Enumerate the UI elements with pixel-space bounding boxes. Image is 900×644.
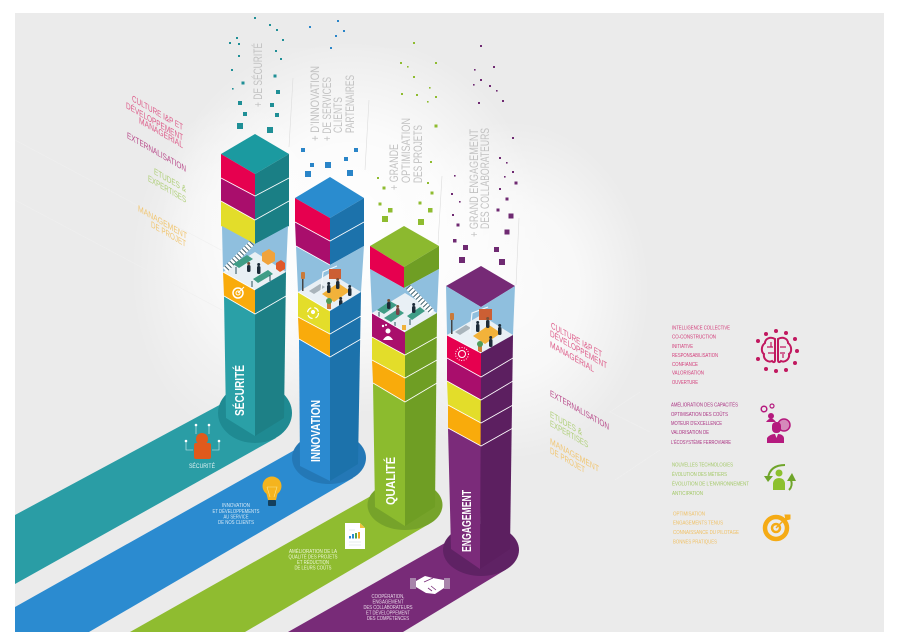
caption: engagement: DES COLLABORATEURS bbox=[478, 128, 492, 229]
column title: ENGAGEMENT bbox=[460, 490, 474, 552]
icon: document chart bbox=[345, 523, 365, 549]
caption: engagement: ET DÉVELOPPEMENT bbox=[366, 610, 410, 616]
top face bbox=[221, 134, 289, 174]
label: culture bbox=[126, 94, 183, 151]
column: qualité bbox=[370, 226, 439, 526]
caption: innovation: DE NOS CLIENTS bbox=[218, 520, 254, 526]
list: externalisation: L’ÉCOSYSTÈME FERROVIAIRE bbox=[671, 439, 731, 446]
list: culture: CONFIANCE bbox=[672, 362, 698, 368]
upper right face bbox=[330, 198, 364, 265]
caption: qualité: AMÉLIORATION DE LA bbox=[289, 548, 337, 555]
label: culture: DÉVELOPPEMENT bbox=[550, 329, 607, 372]
list: etudes: ÉVOLUTION DE L’ENVIRONNEMENT bbox=[672, 480, 750, 488]
caption: qualité: DES PROJETS bbox=[411, 125, 425, 183]
column: engagement bbox=[446, 266, 515, 569]
label: culture: MANAGÉRIAL bbox=[139, 116, 183, 151]
label: etudes bbox=[148, 167, 186, 206]
list: culture bbox=[672, 326, 730, 386]
icon: brain bbox=[456, 348, 468, 360]
upper right face bbox=[255, 154, 289, 244]
list: culture: OUVERTURE bbox=[672, 380, 698, 386]
list: externalisation: MOTEUR D’EXCELLENCE bbox=[671, 421, 722, 427]
caption: qualité: QUALITÉ DES PROJETS bbox=[288, 554, 338, 560]
caption: innovation: + D’INNOVATION bbox=[308, 66, 322, 141]
caption: qualité: DE LEURS COÛTS bbox=[294, 564, 332, 572]
icon: person arrows bbox=[308, 308, 318, 318]
label: culture: DÉVELOPPEMENT bbox=[126, 101, 183, 144]
list: culture: RESPONSABILISATION bbox=[672, 353, 718, 359]
icon: target bbox=[233, 287, 244, 298]
label: externalisation: EXTERNALISATION bbox=[550, 389, 609, 433]
label: culture: CULTURE I&P ET bbox=[132, 94, 183, 133]
label: management: MANAGEMENT bbox=[550, 437, 599, 475]
ribbon: qualité bbox=[130, 492, 429, 632]
caption: de sécurité: + DE SÉCURITÉ bbox=[250, 43, 265, 107]
caption: innovation bbox=[308, 66, 357, 141]
list: culture: VALORISATION bbox=[672, 370, 704, 376]
label: management: MANAGEMENT bbox=[138, 204, 187, 242]
caption: qualité bbox=[288, 548, 338, 572]
list: culture: CO-CONSTRUCTION bbox=[672, 334, 716, 340]
caption: qualité: OPTIMISATION bbox=[399, 118, 413, 183]
list: management: OPTIMISATION bbox=[673, 512, 705, 518]
caption: sécurité: SÉCURITÉ bbox=[189, 463, 215, 470]
caption: innovation: PARTENAIRES bbox=[343, 75, 357, 133]
ribbon icons and captions bbox=[185, 424, 450, 622]
label: etudes: ETUDES & bbox=[154, 167, 186, 195]
ribbon: sécurité bbox=[15, 402, 276, 584]
caption: innovation bbox=[212, 503, 260, 526]
top face bbox=[295, 177, 364, 218]
right slanted labels bbox=[550, 321, 609, 476]
left slanted labels bbox=[126, 94, 187, 250]
squares: innovation bbox=[301, 20, 358, 177]
column title: SÉCURITÉ bbox=[232, 365, 247, 416]
icon: brain bbox=[756, 329, 799, 373]
label: culture: MANAGÉRIAL bbox=[550, 340, 594, 375]
room bbox=[296, 246, 364, 311]
squares: engagement bbox=[451, 45, 518, 265]
label: etudes: EXPERTISES bbox=[148, 174, 186, 206]
list: etudes bbox=[672, 462, 750, 497]
icon: person with arrows bbox=[764, 465, 796, 490]
label: etudes: EXPERTISES bbox=[550, 419, 588, 451]
caption: engagement: DES COMPÉTENCES bbox=[367, 615, 409, 622]
right lists bbox=[671, 326, 750, 546]
list: management: ENGAGEMENTS TENUS bbox=[673, 520, 723, 526]
icon: people bbox=[382, 324, 393, 340]
list: management: BONNES PRATIQUES bbox=[673, 540, 717, 546]
list: externalisation: OPTIMISATION DES COÛTS bbox=[671, 411, 728, 418]
squares: sécurité bbox=[229, 17, 284, 133]
label: management bbox=[550, 437, 599, 476]
caption: engagement: + GRAND ENGAGEMENT bbox=[467, 128, 481, 237]
caption: qualité: ET RÉDUCTION bbox=[297, 559, 329, 566]
room bbox=[222, 226, 288, 290]
icon: handshake bbox=[410, 576, 450, 594]
top captions bbox=[250, 43, 492, 237]
caption: innovation: AU SERVICE bbox=[224, 514, 249, 520]
upper right face bbox=[404, 246, 439, 288]
list: externalisation: VALORISATION DE bbox=[671, 430, 709, 436]
list: culture: INTELLIGENCE COLLECTIVE bbox=[672, 326, 730, 332]
list: etudes: ÉVOLUTION DES MÉTIERS bbox=[672, 471, 727, 478]
list: etudes: ANTICIPATION bbox=[672, 491, 703, 497]
caption: qualité: + GRANDE bbox=[387, 144, 401, 190]
top face bbox=[446, 266, 515, 307]
caption: innovation: ET DÉVELOPPEMENTS bbox=[212, 508, 260, 515]
column title: INNOVATION bbox=[309, 400, 323, 462]
caption: engagement: ENGAGEMENT bbox=[372, 600, 404, 606]
room bbox=[370, 269, 439, 332]
caption: innovation: INNOVATION bbox=[222, 503, 250, 509]
room bbox=[446, 286, 515, 353]
label: culture: CULTURE I&P ET bbox=[551, 321, 602, 360]
icon: manager with globe bbox=[761, 404, 790, 443]
column: innovation bbox=[295, 177, 364, 481]
label: management: DE PROJET bbox=[550, 446, 585, 476]
caption: engagement bbox=[364, 593, 413, 622]
caption: engagement: DES COLLABORATEURS bbox=[364, 605, 413, 611]
label: externalisation: EXTERNALISATION bbox=[127, 131, 186, 175]
list: management bbox=[673, 512, 739, 546]
list: management: CONNAISSANCE DU PILOTAGE bbox=[673, 530, 739, 536]
ribbon: innovation bbox=[15, 447, 353, 632]
caption: qualité bbox=[387, 118, 425, 190]
label: management: DE PROJET bbox=[151, 220, 186, 250]
list: externalisation: AMÉLIORATION DES CAPACITÉS bbox=[671, 402, 738, 408]
list: externalisation bbox=[671, 402, 738, 446]
label: etudes: ETUDES & bbox=[550, 410, 582, 438]
top floating squares bbox=[229, 17, 518, 265]
caption: engagement bbox=[467, 128, 492, 237]
caption: engagement: COOPÉRATION, bbox=[372, 593, 405, 600]
top face bbox=[370, 226, 439, 267]
ribbon: engagement bbox=[288, 539, 506, 632]
column: sécurité bbox=[221, 134, 289, 436]
column bases bbox=[218, 383, 519, 576]
icon: target bbox=[765, 515, 790, 539]
caption: innovation: + DE SERVICES bbox=[320, 77, 334, 141]
list: etudes: NOUVELLES TECHNOLOGIES bbox=[672, 462, 733, 468]
ribbons bbox=[15, 402, 506, 632]
column title: QUALITÉ bbox=[383, 457, 398, 505]
icon: sécurité figure bbox=[185, 424, 220, 459]
icon: lightbulb bbox=[262, 476, 282, 506]
squares: qualité bbox=[377, 42, 438, 225]
caption: innovation: CLIENTS bbox=[331, 97, 345, 133]
list: culture: INITIATIVE bbox=[672, 344, 693, 350]
